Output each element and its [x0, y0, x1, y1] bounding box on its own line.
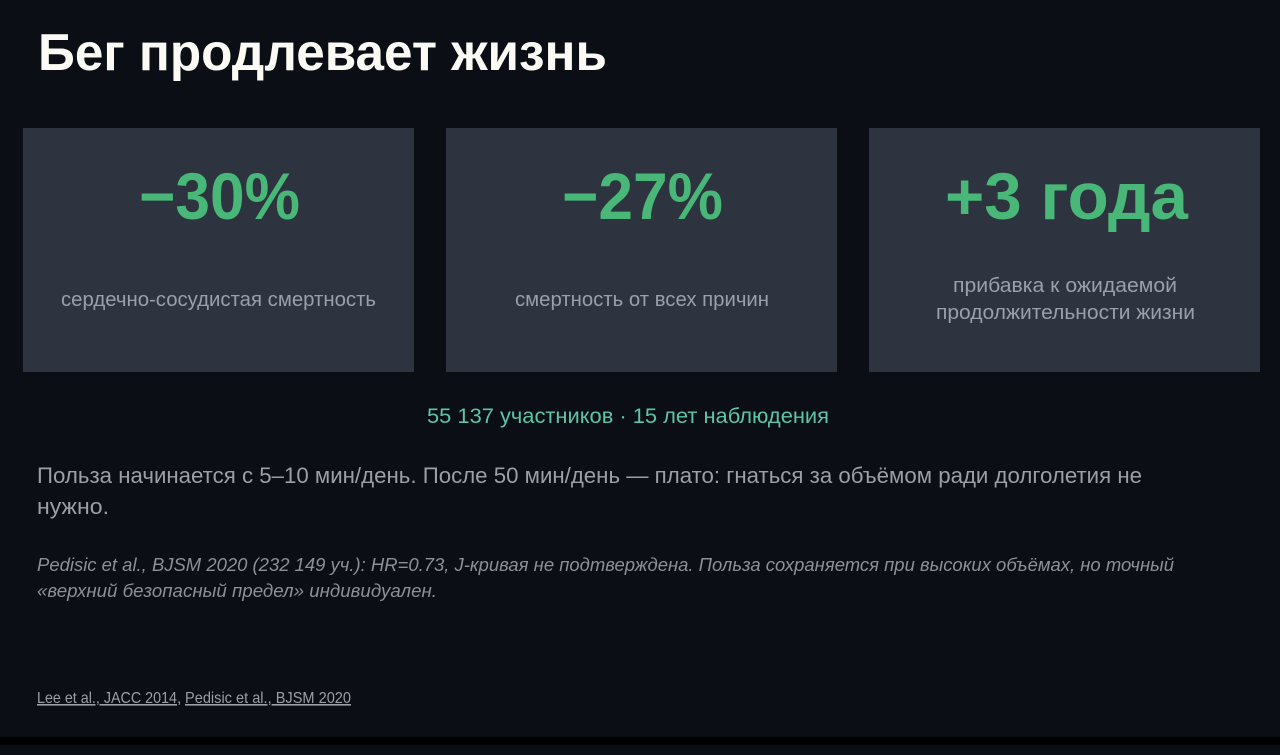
- stat: minus 30 percent: −30%: [139, 159, 300, 233]
- study detail note: [37, 555, 1174, 601]
- stat: plus 3 years: +3 года: [945, 159, 1189, 233]
- stat: minus 27 percent: −27%: [562, 159, 723, 233]
- source links: Lee et al., JACC 2014: [37, 690, 177, 707]
- panel: cardiovascular mortality: [23, 128, 414, 372]
- stat label: смертность от всех причин: [515, 289, 769, 311]
- main takeaway text: нужно.: [37, 494, 109, 519]
- title: Бег продлевает жизнь: [38, 24, 607, 82]
- main takeaway text: Польза начинается с 5–10 мин/день. После 50 мин/день — плато: гнаться за объёмом ради долголетия не: [37, 463, 1142, 488]
- stat label: [936, 275, 1195, 324]
- stat label: прибавка к ожидаемой: [953, 275, 1177, 297]
- study detail note: Pedisic et al., BJSM 2020 (232 149 уч.): HR=0.73, J-кривая не подтверждена. Польза сохраняется при высоких объёмах, но точный: [37, 555, 1174, 575]
- main takeaway text: [37, 463, 1142, 519]
- panel: life expectancy: [869, 128, 1260, 372]
- study detail note: «верхний безопасный предел» индивидуален.: [37, 581, 437, 601]
- panel: all-cause mortality: [446, 128, 837, 372]
- stat label: сердечно-сосудистая смертность: [61, 289, 376, 311]
- source links: ,: [177, 690, 181, 707]
- source links: Pedisic et al., BJSM 2020: [185, 690, 351, 707]
- study size note: 55 137 участников · 15 лет наблюдения: [427, 405, 829, 428]
- source links: [37, 690, 351, 707]
- stat label: продолжительности жизни: [936, 302, 1195, 324]
